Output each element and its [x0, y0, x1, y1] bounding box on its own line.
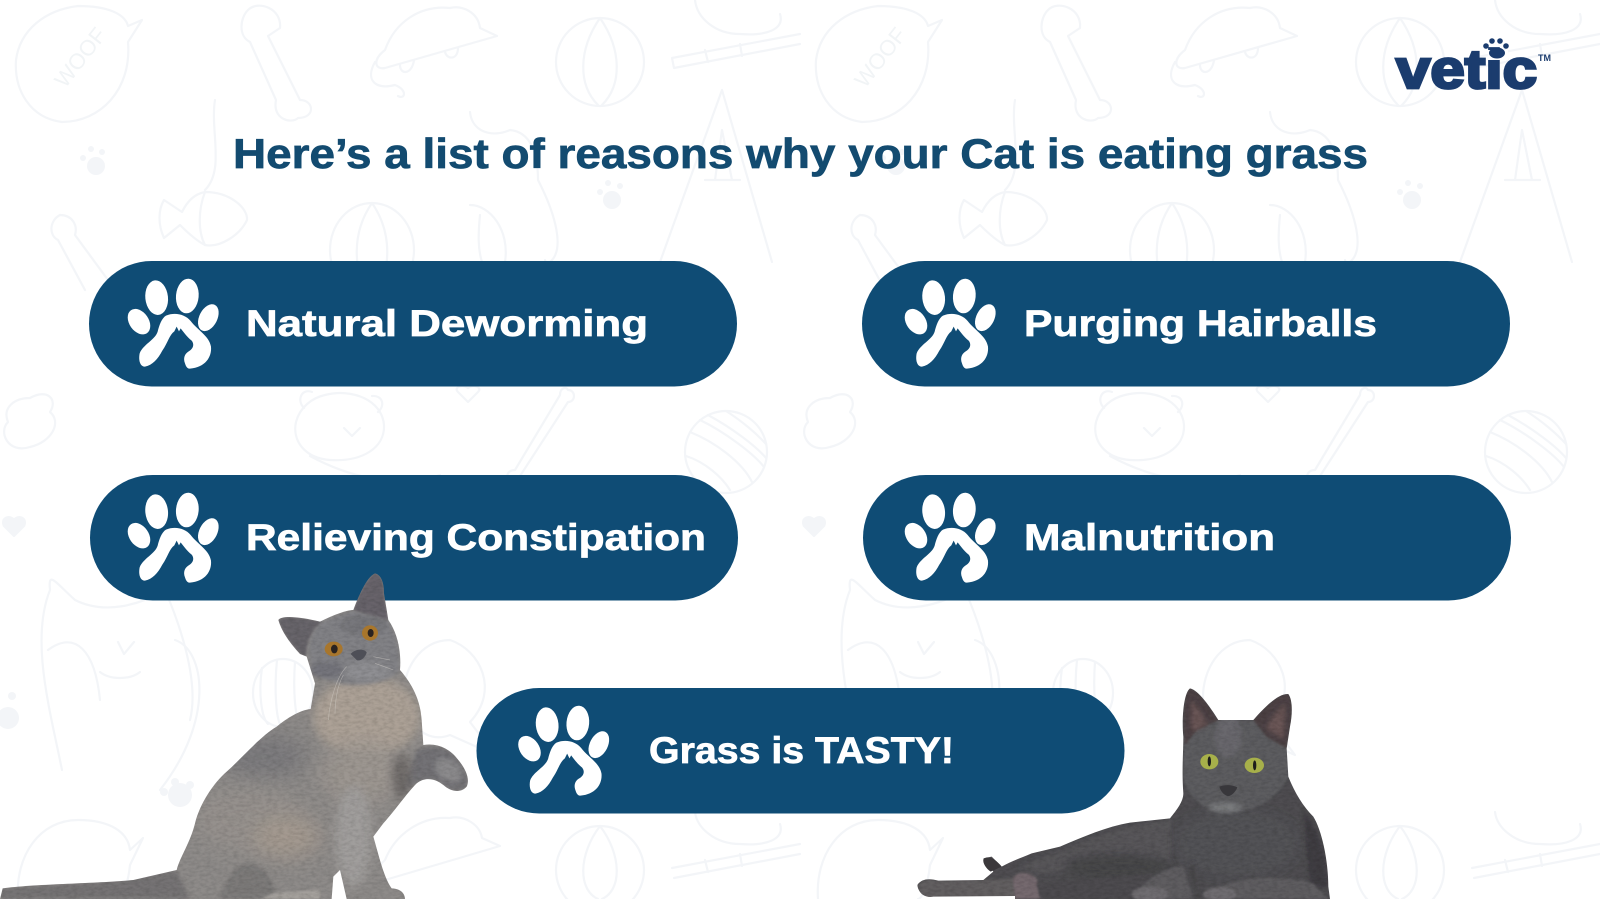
whiskers — [328, 657, 393, 720]
nose — [1219, 785, 1237, 796]
label: Relieving Constipation — [246, 517, 706, 558]
background doodle pattern: WOOF — [849, 23, 911, 92]
icon: paw — [900, 278, 1000, 369]
illustration: dark lying cat — [917, 688, 1330, 899]
panel: Malnutrition — [863, 475, 1511, 600]
logo: vetic: vetic — [1396, 38, 1537, 100]
illustration: grey sitting cat — [0, 560, 480, 899]
label: Grass is TASTY! — [649, 730, 954, 771]
icon: paw — [123, 278, 223, 369]
tail tip — [983, 857, 1002, 872]
nose — [351, 650, 367, 660]
label: Malnutrition — [1024, 517, 1275, 558]
eyes — [1200, 754, 1218, 769]
ears — [353, 573, 388, 620]
background doodle pattern: WOOF — [49, 23, 111, 92]
label: Purging Hairballs — [1024, 303, 1377, 344]
title: Here’s a list of reasons why your Cat is eating grass — [233, 130, 1368, 177]
label: Natural Deworming — [246, 303, 648, 344]
panel: Grass is TASTY! — [476, 688, 1124, 814]
panel: Relieving Constipation — [90, 475, 738, 600]
eyes — [325, 642, 343, 656]
icon: paw — [514, 705, 613, 796]
head — [1183, 720, 1288, 813]
icon: logo paw — [1483, 38, 1509, 60]
head — [308, 610, 400, 685]
panel: Natural Deworming — [89, 261, 737, 386]
panel: Purging Hairballs — [862, 261, 1510, 386]
ears — [1184, 688, 1218, 745]
icon: paw — [123, 492, 223, 583]
trademark: TM — [1538, 53, 1551, 63]
icon: paw — [900, 492, 1000, 583]
